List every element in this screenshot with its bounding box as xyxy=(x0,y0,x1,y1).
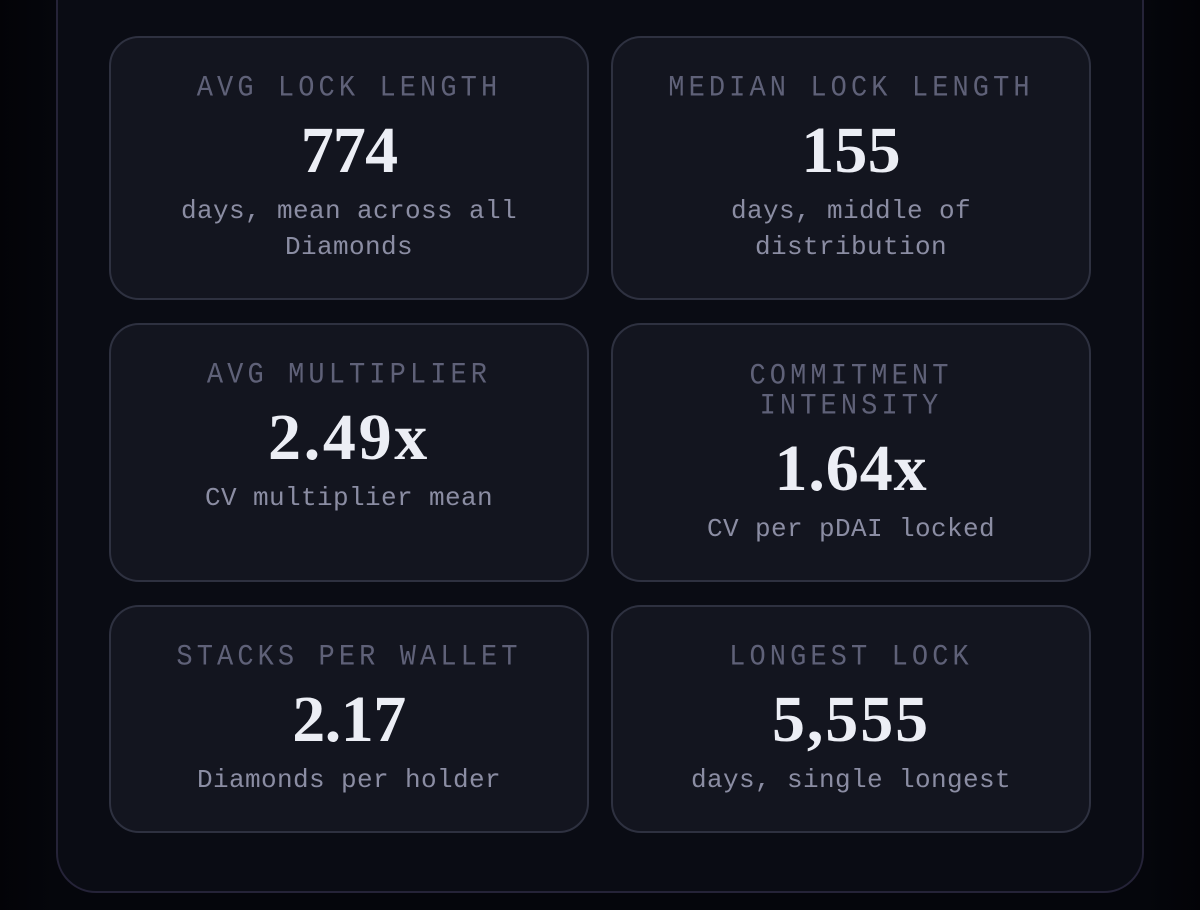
label: stacks per wallet: STACKS PER WALLET xyxy=(176,642,522,674)
card: median lock length xyxy=(611,36,1091,300)
label: avg lock length: AVG LOCK LENGTH xyxy=(197,73,501,105)
card: avg lock length xyxy=(109,36,589,300)
description: days middle: days, middle of xyxy=(731,196,971,226)
value: 1.64x: 1.64x xyxy=(774,432,928,505)
value: 2.49x: 2.49x xyxy=(268,401,430,474)
description: days middle: distribution xyxy=(755,232,947,262)
label: longest lock: LONGEST LOCK xyxy=(729,642,973,674)
card: stacks per wallet xyxy=(109,605,589,833)
value: 5,555: 5,555 xyxy=(772,683,930,756)
value: 774: 774 xyxy=(301,114,397,187)
card: avg multiplier xyxy=(109,323,589,582)
description: days middle xyxy=(731,196,971,262)
description: cv per pdai locked: CV per pDAI locked xyxy=(707,514,995,544)
description: days mean: days, mean across all xyxy=(181,196,517,226)
label: avg multiplier: AVG MULTIPLIER xyxy=(207,360,491,392)
description: days mean xyxy=(181,196,517,262)
label: median lock length: MEDIAN LOCK LENGTH xyxy=(668,73,1034,105)
label: commitment intensity xyxy=(749,361,953,423)
description: days single longest: days, single longest xyxy=(691,765,1011,795)
description: diamonds per holder: Diamonds per holder xyxy=(197,765,501,795)
card: longest lock xyxy=(611,605,1091,833)
description: cv multiplier mean: CV multiplier mean xyxy=(205,483,493,513)
label: commitment intensity: COMMITMENT xyxy=(749,361,953,393)
label: commitment intensity: INTENSITY xyxy=(760,391,942,423)
value: 2.17: 2.17 xyxy=(292,683,406,756)
value: 155: 155 xyxy=(801,114,901,187)
description: days mean: Diamonds xyxy=(285,232,413,262)
card: commitment intensity xyxy=(611,323,1091,582)
